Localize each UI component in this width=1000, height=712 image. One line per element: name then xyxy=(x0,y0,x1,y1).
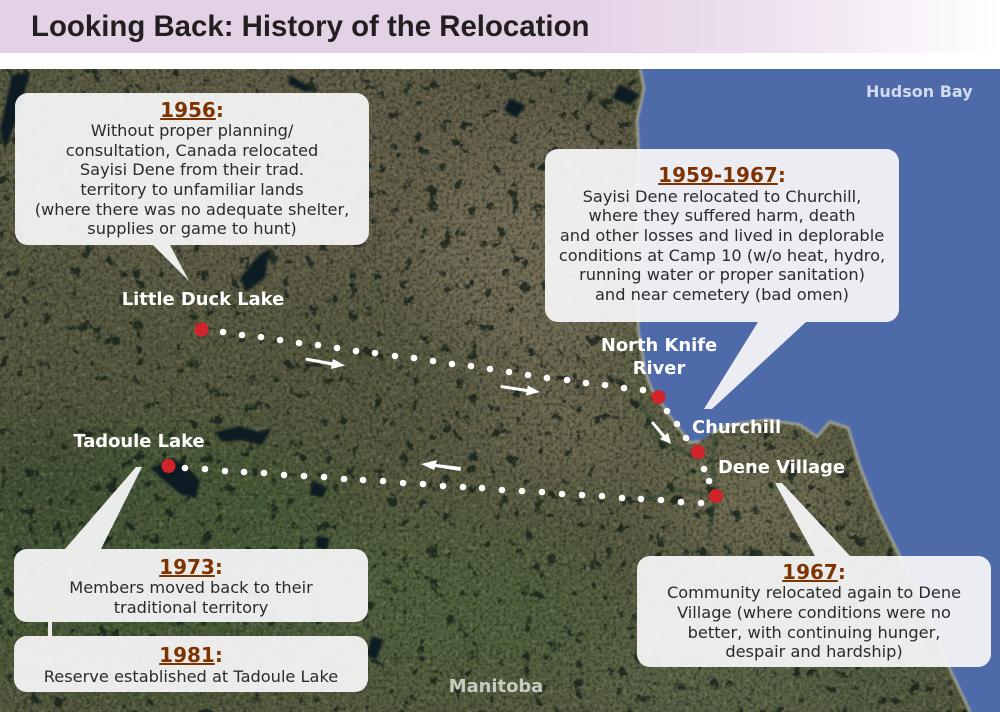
location marker: Little Duck Lake xyxy=(194,322,208,336)
callout: 1956: consultation, Canada relocated xyxy=(66,141,318,160)
callout: 1956: (where there was no adequate shelter, xyxy=(35,200,349,219)
callout: 1981 xyxy=(14,636,368,692)
callout: 1956: supplies or game to hunt) xyxy=(87,219,297,238)
callout: 1967: despair and hardship) xyxy=(725,642,903,661)
callout: 1967 xyxy=(637,556,991,667)
callout: 1967: Village (where conditions were no xyxy=(677,603,951,622)
callout pointer: Tadoule Lake xyxy=(65,467,142,549)
place label: Churchill: Churchill xyxy=(692,417,781,438)
callout pointer: Little Duck Lake xyxy=(153,245,189,281)
callout: 1973: traditional territory xyxy=(114,598,269,617)
callout: 1956: territory to unfamiliar lands xyxy=(80,180,304,199)
callout: 1959-1967: conditions at Camp 10 (w/o heat, hydro, xyxy=(559,246,885,265)
callout: 1959-1967 xyxy=(545,149,899,322)
large lakes xyxy=(0,72,640,660)
callout: 1967: 1967: xyxy=(782,560,846,584)
callout: 1967: better, with continuing hunger, xyxy=(688,623,940,642)
coastline beach xyxy=(637,69,970,712)
callout: 1973 xyxy=(14,549,368,622)
place label: Little Duck Lake: Little Duck Lake xyxy=(122,289,284,310)
location marker: Churchill xyxy=(691,445,705,459)
arrow: toward North Knife River, first leg xyxy=(306,358,345,369)
arrow: toward Churchill xyxy=(651,421,671,444)
callout: 1959-1967: where they suffered harm, death xyxy=(588,206,856,225)
callout: 1973: Members moved back to their xyxy=(69,578,313,597)
place label: Hudson Bay: Hudson Bay xyxy=(866,82,973,101)
callout pointer: Churchill xyxy=(704,322,806,409)
location marker: North Knife River xyxy=(652,390,666,404)
callout: 1959-1967: running water or proper sanitation) xyxy=(579,265,865,284)
callout: 1959-1967: 1959-1967: xyxy=(658,163,786,187)
title: Looking Back: History of the Relocation xyxy=(31,10,589,43)
callout: 1959-1967: Sayisi Dene relocated to Churchill, xyxy=(583,187,861,206)
callout: 1959-1967: and other losses and lived in deplorable xyxy=(560,226,884,245)
arrow: toward Tadoule Lake xyxy=(421,460,461,471)
connector between 1973 and 1981 callouts xyxy=(48,622,52,636)
callout: 1967: Community relocated again to Dene xyxy=(667,583,961,602)
title banner xyxy=(0,0,1000,53)
callout: 1981: 1981: xyxy=(159,643,223,667)
place label: North Knife River: River xyxy=(633,358,685,379)
Churchill river xyxy=(640,400,716,540)
place label: Manitoba: Manitoba xyxy=(449,676,543,697)
route: dotted white line xyxy=(182,329,712,506)
callout: 1956: 1956: xyxy=(160,98,224,122)
place label: North Knife River: North Knife xyxy=(601,335,717,356)
Hudson Bay water xyxy=(637,69,1000,712)
callout: 1981: Reserve established at Tadoule Lake xyxy=(44,667,338,686)
arrow: toward North Knife River, second leg xyxy=(500,385,540,396)
callout: 1973: 1973: xyxy=(159,555,223,579)
callout pointer: Dene Village xyxy=(775,483,850,556)
place label: Tadoule Lake: Tadoule Lake xyxy=(73,431,205,452)
location marker: Dene Village xyxy=(709,489,723,503)
location marker: Tadoule Lake xyxy=(162,459,176,473)
place label: Dene Village: Dene Village xyxy=(718,457,845,478)
callout: 1959-1967: and near cemetery (bad omen) xyxy=(595,285,849,304)
callout: 1956: Sayisi Dene from their trad. xyxy=(80,160,304,179)
callout: 1956: Without proper planning/ xyxy=(91,121,294,140)
callout: 1956 xyxy=(15,93,369,245)
